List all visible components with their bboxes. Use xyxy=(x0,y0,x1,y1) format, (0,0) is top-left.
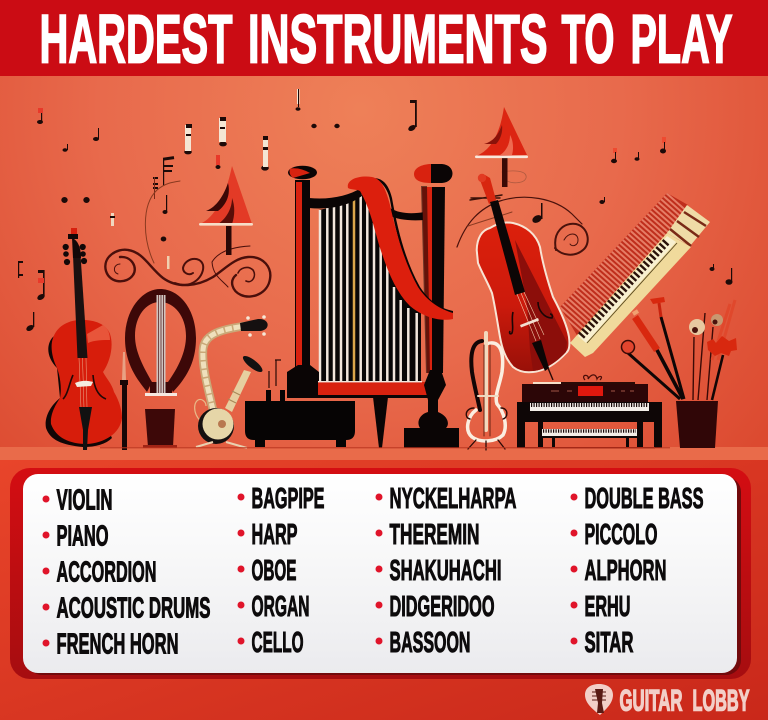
harp red swoosh xyxy=(348,177,453,320)
title xyxy=(40,0,732,78)
floor line xyxy=(100,447,670,448)
illustration: pot of mallets xyxy=(622,297,737,448)
list column 3: NYCKELHARPA xyxy=(390,483,516,515)
list column 4: ERHU xyxy=(584,591,630,623)
list column 4: PICCOLO xyxy=(584,519,658,551)
lower red background xyxy=(0,460,768,720)
list column 3 xyxy=(376,483,516,659)
illustration: music notes xyxy=(18,89,732,332)
illustration: right lamp xyxy=(475,107,528,187)
title: HARDEST xyxy=(40,0,232,78)
list column 3: SHAKUHACHI xyxy=(390,555,502,587)
list column 3: BASSOON xyxy=(390,627,470,659)
illustration: left lamp xyxy=(199,166,253,255)
list column 2: BAGPIPE xyxy=(252,483,324,515)
list panel xyxy=(10,468,751,679)
floor strip xyxy=(0,447,768,461)
list column 1 xyxy=(42,484,210,660)
list column 4: SITAR xyxy=(584,627,634,659)
harp neck arcs xyxy=(309,188,425,220)
list column 2 xyxy=(238,483,324,659)
title: INSTRUMENTS xyxy=(248,0,548,78)
list column 1: VIOLIN xyxy=(56,484,112,516)
illustration: accordion xyxy=(560,193,710,357)
logo: Guitar Lobby xyxy=(585,684,750,718)
illustration: electronic piano xyxy=(517,375,662,448)
list column 2: CELLO xyxy=(252,627,304,659)
icon: guitar pick xyxy=(585,684,613,715)
illustration: left swirl ornament xyxy=(105,181,270,297)
title: TO xyxy=(562,0,614,78)
list column 2: HARP xyxy=(252,519,298,551)
illustration: bow stick xyxy=(120,352,128,450)
illustration: saxophone banjo xyxy=(195,315,268,448)
harp right column xyxy=(404,164,459,448)
logo wordmark: GUITAR xyxy=(620,684,683,718)
illustration: harp xyxy=(287,164,459,448)
wall background xyxy=(0,76,768,448)
list column 2: OBOE xyxy=(252,555,296,587)
list column 1: PIANO xyxy=(56,520,108,552)
illustration: left violin xyxy=(46,228,122,450)
list column 4 xyxy=(570,483,704,659)
harp strings xyxy=(319,193,421,382)
list column 1: ACOUSTIC DRUMS xyxy=(56,592,210,624)
title banner xyxy=(0,0,768,78)
harp left column xyxy=(287,166,319,398)
harp base xyxy=(318,381,430,448)
list column 2: ORGAN xyxy=(252,591,310,623)
list column 1: FRENCH HORN xyxy=(56,628,178,660)
illustration: lyre xyxy=(125,289,196,448)
list column 3: THEREMIN xyxy=(390,519,480,551)
illustration: harp bench xyxy=(245,360,355,447)
illustration: large cello xyxy=(477,174,569,380)
illustration: small white violin xyxy=(466,333,507,450)
list column 3: DIDGERIDOO xyxy=(390,591,494,623)
list column 4: ALPHORN xyxy=(584,555,666,587)
list column 1: ACCORDION xyxy=(56,556,156,588)
illustration: right swirl ornament xyxy=(457,171,588,255)
